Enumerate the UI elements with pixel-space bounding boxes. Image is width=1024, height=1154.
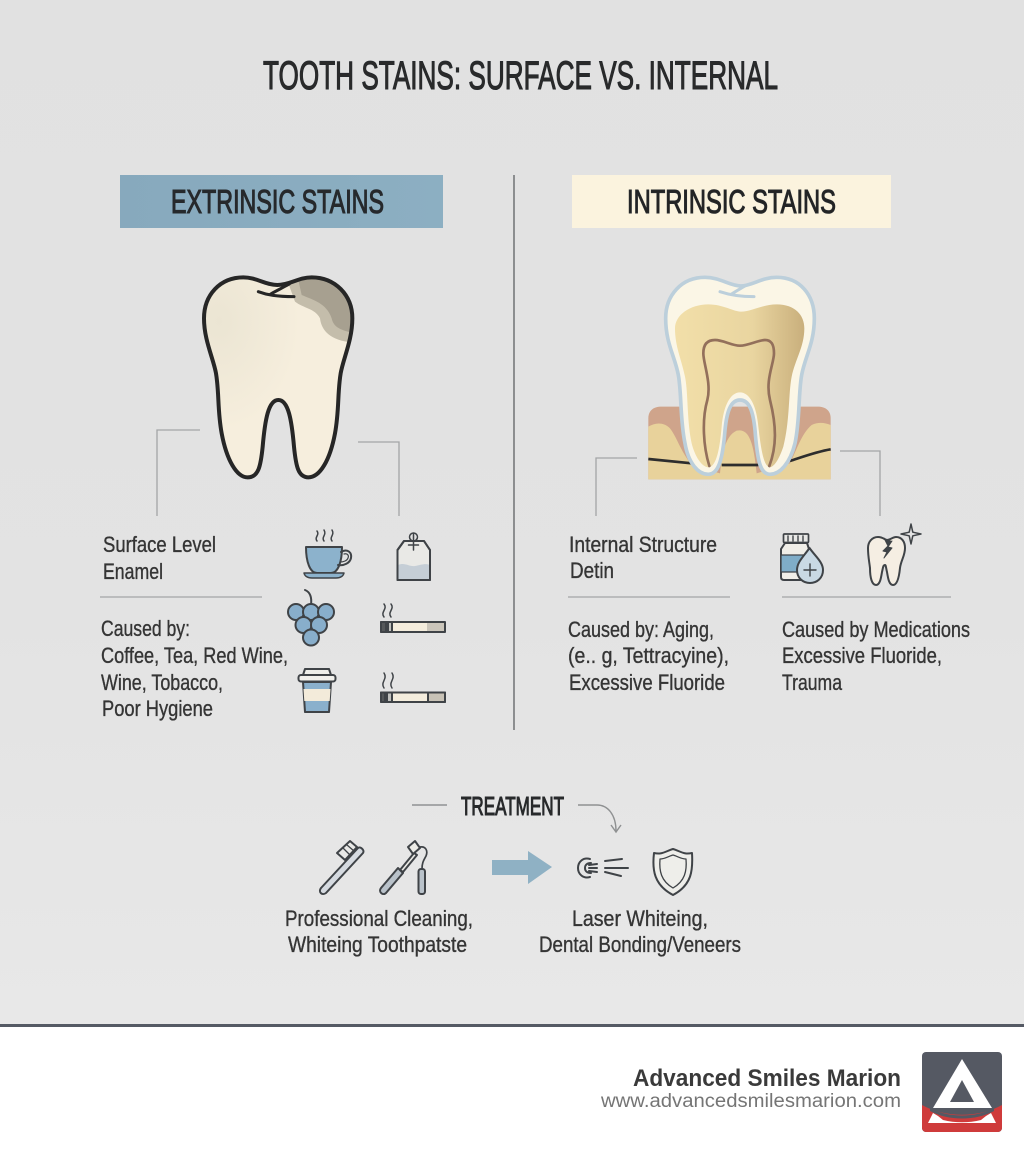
icon: shield [653,849,692,895]
panel: treatment [285,791,741,957]
text: intrinsic causes right: Excessive Fluoride, [782,643,942,668]
text: intrinsic causes left [568,617,729,695]
icon: coffee cup [304,530,351,578]
text: extrinsic causes: Coffee, Tea, Red Wine, [101,643,288,668]
center divider [513,175,515,730]
text: surface level enamel: Surface Level [103,532,216,557]
icon: tea bag [398,533,430,580]
text: extrinsic causes [101,616,288,721]
illustration: tooth cross-section with gum [648,277,831,479]
icon: cigarette second [381,673,445,702]
callout connector: causes [840,451,880,516]
footer brand name: Advanced Smiles Marion [633,1065,901,1092]
heading: extrinsic stains: EXTRINSIC STAINS [171,183,384,220]
text: intrinsic causes left: Caused by: Aging, [568,617,714,642]
text: laser whitening: Dental Bonding/Veneers [539,932,741,957]
icon: takeaway cup [298,669,336,712]
text: surface level enamel [103,532,216,584]
panel: extrinsic stains [100,175,445,721]
footer [0,1024,1024,1154]
logo [922,1052,1002,1132]
text: laser whitening: Laser Whiteing, [572,906,708,931]
text: intrinsic causes left: Excessive Fluoride [569,670,725,695]
illustration: stained tooth [204,273,357,477]
callout connector: causes [358,442,399,516]
text: professional cleaning: Professional Cleaning, [285,906,473,931]
icon: cracked tooth with sparkle [868,524,921,585]
text: internal structure detin: Internal Structure [569,532,717,557]
icon: grapes [288,590,334,646]
text: internal structure detin: Detin [570,558,614,583]
heading: extrinsic stains [120,175,443,228]
text: internal structure detin [569,532,717,583]
callout connector: surface level [157,430,200,516]
heading: intrinsic stains: INTRINSIC STAINS [627,183,836,220]
text: extrinsic causes: Poor Hygiene [102,696,213,721]
text: extrinsic causes: Caused by: [101,616,190,641]
arrow: blue transition [492,851,552,884]
icon: medication bottle with drop [781,534,823,583]
heading: treatment: TREATMENT [461,791,564,821]
panel: intrinsic stains [568,175,970,695]
text: professional cleaning [285,906,473,957]
arrow: treatment curve [578,805,621,832]
text: intrinsic causes right: Caused by Medications [782,617,970,642]
icon: laser [578,859,628,877]
text: intrinsic causes left: (e.. g, Tettracyine), [568,643,729,668]
text: professional cleaning: Whiteing Toothpatste [288,932,467,957]
text: intrinsic causes right: Trauma [782,670,843,695]
callout connector: internal structure [596,458,637,516]
text: surface level enamel: Enamel [103,559,163,584]
text: laser whitening [539,906,741,957]
icon: dental scaler [380,841,427,894]
footer url: www.advancedsmilesmarion.com [600,1091,901,1112]
text: intrinsic causes right [782,617,970,695]
icon: cigarette [381,604,445,632]
heading: intrinsic stains [572,175,891,228]
icon: toothbrush [320,841,363,894]
text: extrinsic causes: Wine, Tobacco, [101,670,223,695]
